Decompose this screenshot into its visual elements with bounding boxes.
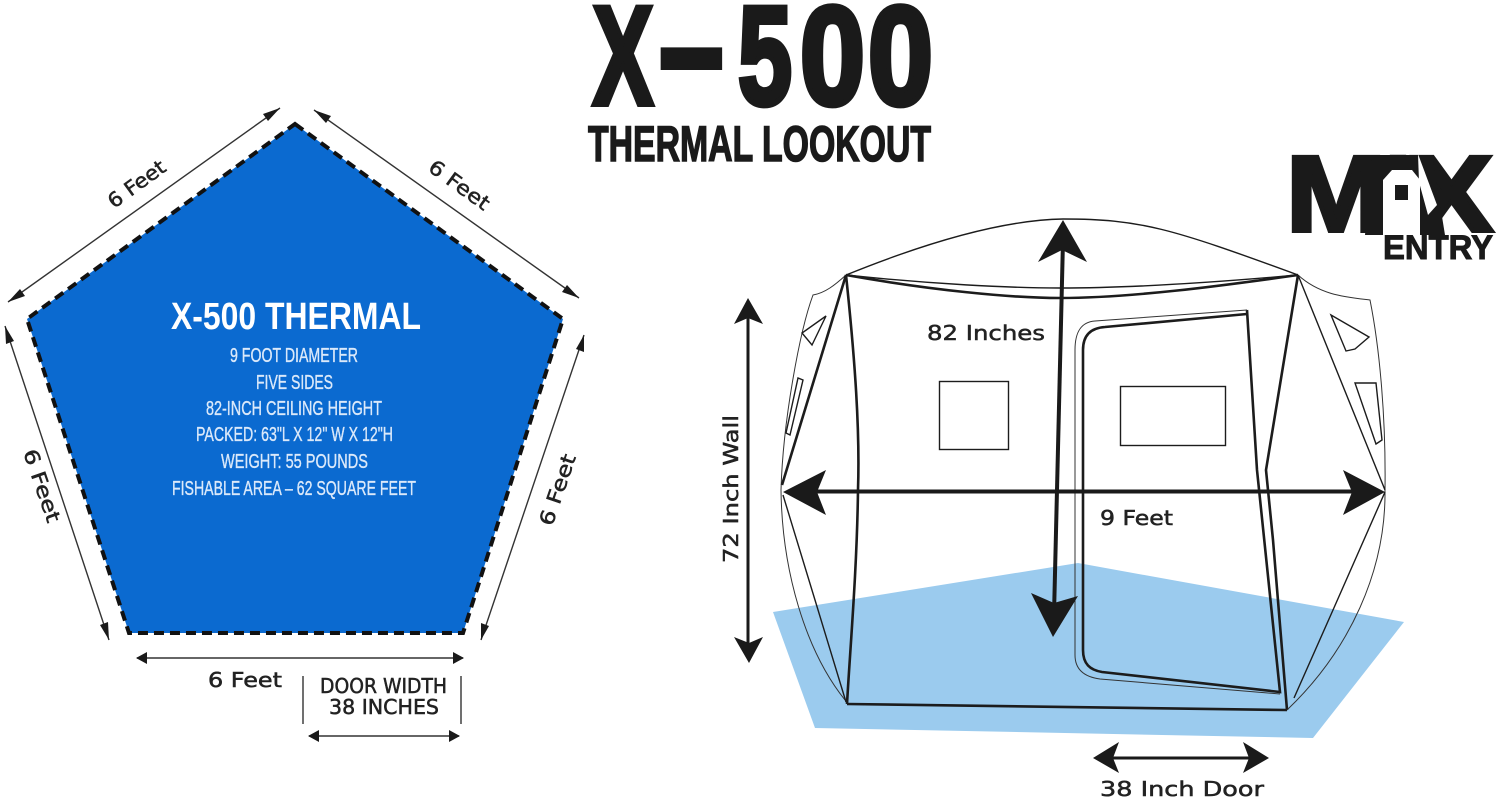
logo: Max Entry: M (1286, 133, 1386, 254)
windows (940, 382, 1008, 450)
text block: specifications (172, 345, 416, 500)
logo: Max Entry: X (1410, 133, 1493, 254)
callout: door width: 38 INCHES (329, 695, 439, 719)
label: left 6 feet: 6 Feet (18, 446, 66, 526)
text block: specifications: 9 FOOT DIAMETER (230, 345, 358, 367)
arrow: left side dimension (5, 326, 109, 640)
roof curves (846, 219, 1298, 275)
label: 9 feet: 9 Feet (1100, 506, 1173, 530)
text block: specifications: FIVE SIDES (256, 372, 333, 394)
text block: specifications: 82-INCH CEILING HEIGHT (206, 398, 382, 420)
arrow: top-left side dimension (8, 108, 280, 302)
callout: door width: DOOR WIDTH (320, 674, 447, 698)
arrow: bottom side dimension (136, 652, 464, 664)
left side panel (781, 275, 846, 700)
front corners (846, 275, 858, 704)
text block: specifications: PACKED: 63"L X 12" W X 12"H (196, 424, 393, 446)
door (1083, 310, 1280, 692)
diagram: tent outline (781, 219, 1385, 710)
text block: specifications: WEIGHT: 55 POUNDS (221, 451, 368, 473)
arrow: 9 feet width (783, 470, 1385, 515)
heading: X-500 Thermal: X-500 THERMAL (171, 296, 421, 338)
subtitle: Thermal Lookout: THERMAL LOOKOUT (588, 116, 931, 172)
floor area (773, 563, 1404, 738)
logo: Max Entry: ENTRY (1383, 229, 1493, 267)
logo: Max Entry: A (1368, 133, 1428, 254)
callout: door width (303, 674, 461, 742)
arrow: 82 inches height (1031, 220, 1087, 637)
label: top-left 6 feet: 6 Feet (103, 155, 170, 213)
arrow: right side dimension (481, 335, 584, 640)
panel: floor plan pentagon (27, 124, 563, 633)
text block: specifications: FISHABLE AREA – 62 SQUARE FEET (172, 478, 416, 500)
label: bottom 6 feet: 6 Feet (208, 668, 282, 692)
arrow: top-right side dimension (314, 110, 579, 298)
label: 82 inches: 82 Inches (927, 321, 1045, 345)
label: 72 inch wall: 72 Inch Wall (719, 415, 743, 563)
label: right 6 feet: 6 Feet (534, 451, 581, 529)
arrow: 38 inch door (1093, 742, 1269, 773)
right side panel (1287, 275, 1385, 710)
logo: Max Entry (1286, 133, 1493, 267)
label: top-right 6 feet: 6 Feet (424, 155, 495, 215)
arrow: 72 inch wall (734, 298, 763, 663)
